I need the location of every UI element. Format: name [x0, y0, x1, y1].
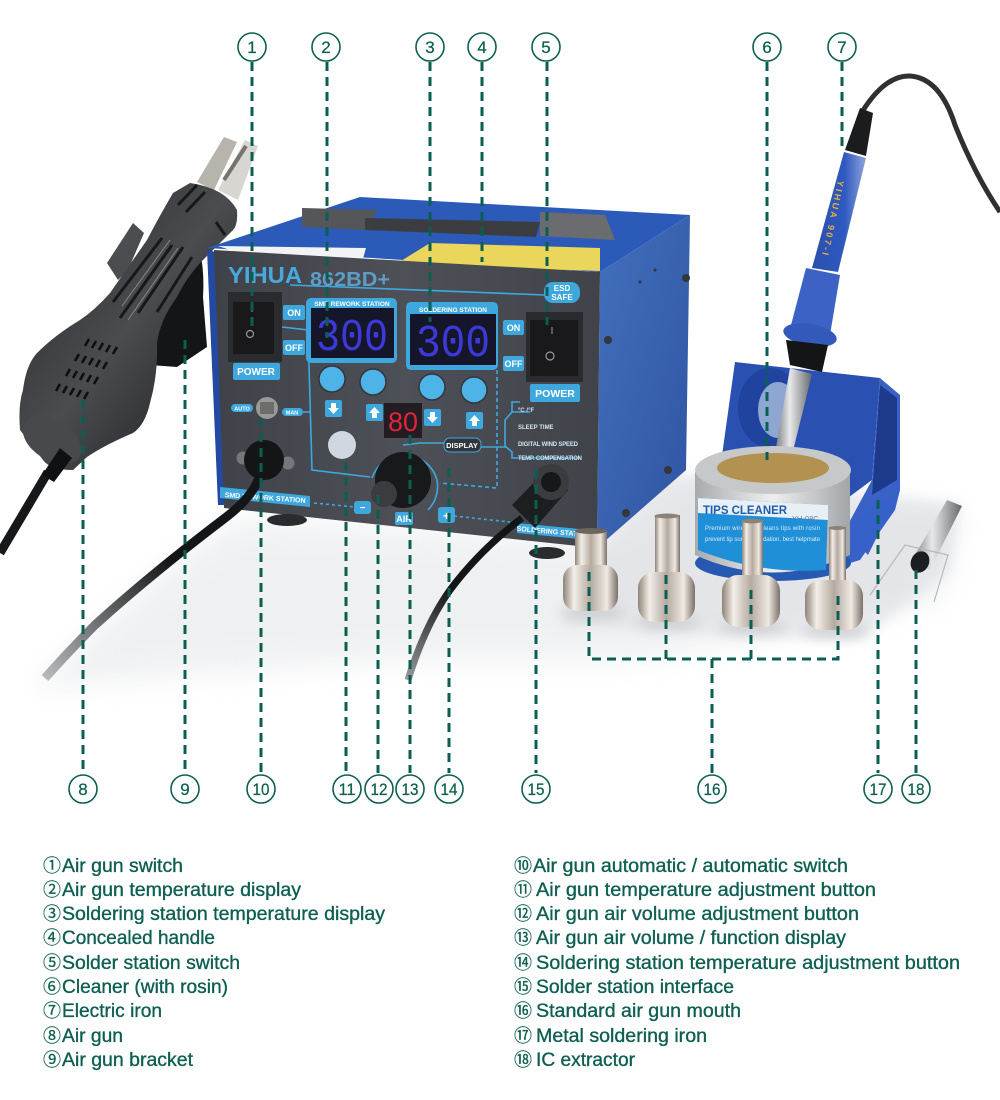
- callout 8: 8: [78, 780, 88, 799]
- front panel: [214, 250, 600, 548]
- nozzle C: [722, 518, 780, 627]
- nozzle A: [563, 528, 618, 611]
- air display: 80: [388, 407, 418, 437]
- gun rib highlights: [122, 240, 178, 320]
- yellow warning label: [396, 243, 600, 271]
- item 15: Solder station interface: [536, 977, 734, 998]
- right OFF: OFF: [504, 359, 523, 369]
- MAN label: [282, 408, 303, 416]
- cleaner label: YH-08C: [792, 514, 819, 523]
- callout 17: [864, 775, 892, 803]
- callout 14: [435, 775, 463, 803]
- callout 4: [468, 33, 496, 61]
- left POWER: POWER: [237, 367, 276, 378]
- air display: [384, 403, 422, 438]
- hot air gun: [0, 137, 258, 553]
- stand side wall: [845, 378, 900, 555]
- callout 6: [753, 33, 781, 61]
- item 9: Air gun bracket: [62, 1050, 194, 1071]
- arrow keys: [325, 400, 483, 429]
- top face: [207, 197, 690, 272]
- cleaner can: [695, 472, 850, 572]
- callout 9: 9: [180, 780, 190, 799]
- item 13: Air gun air volume / function display: [536, 928, 847, 949]
- iron black nut: [786, 340, 828, 372]
- gun ribs: [113, 185, 225, 318]
- item 13: ⑬: [514, 924, 532, 950]
- left cable: [45, 462, 262, 678]
- callout 3: [416, 33, 444, 61]
- left POWER: [233, 363, 280, 380]
- callout 10: 10: [252, 780, 270, 799]
- callout 2: [312, 33, 340, 61]
- nozzle B: [638, 514, 695, 622]
- gun body: [19, 183, 237, 470]
- SMD display: SMD REWORK STATION: [314, 301, 390, 308]
- item 1: Air gun switch: [62, 856, 183, 877]
- callout 17: 17: [870, 780, 886, 799]
- callout 18: 18: [908, 780, 924, 799]
- MAN label: MAN: [286, 410, 298, 416]
- function list: °C /°F: [518, 408, 534, 414]
- callout 12: [365, 775, 393, 803]
- left rocker switch: [228, 292, 282, 362]
- callout 5: 5: [541, 38, 551, 57]
- left OFF: OFF: [285, 343, 303, 353]
- rework station label: SMD REWORK STATION: [224, 492, 306, 505]
- ESD badge: SAFE: [551, 293, 573, 302]
- item 17: ⑰: [514, 1022, 532, 1048]
- item 17: Metal soldering iron: [536, 1026, 707, 1047]
- ESD badge: [544, 282, 580, 303]
- iron cord: [862, 76, 1000, 212]
- cleaner rim: [695, 446, 851, 494]
- item 4: ④: [43, 924, 61, 950]
- air gun nozzles: [563, 514, 863, 630]
- left ON: [283, 305, 305, 320]
- item 6: Cleaner (with rosin): [62, 977, 228, 998]
- silver button: [328, 431, 356, 459]
- callout 4: 4: [477, 38, 487, 57]
- item 10: ⑩: [514, 852, 532, 878]
- soldering display: [406, 302, 498, 370]
- callout 14: 14: [440, 780, 458, 799]
- soldering iron stand: [720, 362, 900, 572]
- callout 2: 2: [321, 38, 331, 57]
- soldering iron: [775, 76, 1000, 455]
- leader lines: [83, 62, 916, 773]
- item 3: ③: [43, 900, 61, 926]
- left ON: ON: [287, 308, 301, 318]
- item 6: ⑥: [43, 973, 61, 999]
- item 1: ①: [43, 852, 61, 878]
- item 5: ⑤: [43, 949, 61, 975]
- callout 11: [333, 775, 361, 803]
- item 10: Air gun automatic / automatic switch: [533, 856, 848, 877]
- soldering display: SOLDERING STATION: [419, 307, 487, 314]
- item 9: [43, 1046, 194, 1072]
- gun vent slots: [56, 339, 117, 399]
- handle: [302, 208, 615, 240]
- right connector: [512, 464, 569, 528]
- iron shaft text: YIHUA 907-I: [820, 180, 846, 256]
- item 15: ⑮: [514, 973, 532, 999]
- white label: [218, 246, 366, 262]
- right cable: [408, 518, 522, 680]
- AUTO label: AUTO: [234, 406, 250, 412]
- item 12: ⑫: [514, 900, 532, 926]
- item 1: [43, 852, 183, 878]
- brand: YIHUA: [228, 262, 302, 288]
- AUTO label: [231, 404, 253, 412]
- right ON: [503, 320, 524, 335]
- brand: 862BD+: [310, 269, 390, 291]
- callout 12: 12: [370, 780, 388, 799]
- item 14: Soldering station temperature adjustment button: [536, 953, 960, 974]
- callout 1: [238, 33, 266, 61]
- cleaner label: TIPS CLEANER: [703, 503, 787, 517]
- callout 16: 16: [704, 780, 720, 799]
- gun cord: [0, 472, 48, 553]
- callout 18: [902, 775, 930, 803]
- nozzle shadows: [560, 605, 870, 638]
- item 17: [514, 1022, 707, 1048]
- cleaner base: [695, 545, 851, 581]
- item 11: Air gun temperature adjustment button: [536, 880, 876, 901]
- air knob: [371, 452, 431, 508]
- callout 7: 7: [837, 38, 847, 57]
- cleaner label: [698, 498, 828, 571]
- legend: left column: [43, 852, 386, 1072]
- callout 9: [171, 775, 199, 803]
- AIR label: [395, 512, 413, 525]
- item 18: ⑱: [514, 1046, 532, 1072]
- callout 11: 11: [338, 780, 356, 799]
- iron shaft: [812, 152, 866, 272]
- item 14: ⑭: [514, 949, 532, 975]
- cleaner label: prevent tip surface oxidation, best helpmate: [705, 537, 821, 543]
- legend: right column: [514, 852, 960, 1072]
- item 7: ⑦: [43, 997, 61, 1023]
- item 8: Air gun: [62, 1026, 123, 1047]
- callout 15: [522, 775, 550, 803]
- function list: TEMP. COMPENSATION: [518, 456, 582, 462]
- item 8: ⑧: [43, 1022, 61, 1048]
- item 11: ⑪: [514, 876, 532, 902]
- SMD display: 300: [316, 313, 388, 364]
- item 16: Standard air gun mouth: [536, 1001, 741, 1022]
- item 9: ⑨: [43, 1046, 61, 1072]
- callout 6: 6: [762, 38, 772, 57]
- stand back plate: [720, 362, 880, 500]
- callout 10: [247, 775, 275, 803]
- minus key: −: [360, 503, 366, 514]
- left blue edge: [207, 250, 226, 505]
- holder ring: [738, 368, 802, 448]
- item 18: IC extractor: [536, 1050, 636, 1071]
- plus key: [438, 507, 455, 523]
- brand: [228, 262, 390, 291]
- left connector: [236, 440, 294, 480]
- gun strain relief: [42, 448, 72, 482]
- right rocker switch: [526, 312, 583, 382]
- panel buttons: [319, 366, 487, 403]
- brass wool: [717, 453, 829, 483]
- function list: [518, 408, 582, 462]
- gun metal nozzle tubes: [197, 137, 258, 200]
- base unit: [45, 197, 690, 680]
- iron strain relief: [845, 108, 873, 156]
- panel circuit lines: [282, 327, 580, 522]
- gun clip: [107, 223, 144, 280]
- item 18: [514, 1046, 636, 1072]
- item 3: Soldering station temperature display: [62, 904, 386, 925]
- plus key: +: [443, 509, 450, 523]
- callout 16: [698, 775, 726, 803]
- IC extractor: [870, 500, 962, 602]
- brand underline: [290, 285, 545, 295]
- iron collar: [782, 319, 838, 351]
- item 12: Air gun air volume adjustment button: [536, 904, 859, 925]
- callout 8: [69, 775, 97, 803]
- callout 1: 1: [247, 38, 257, 57]
- toggle switch: [256, 397, 278, 419]
- item 2: Air gun temperature display: [62, 880, 302, 901]
- stand inner shade: [872, 385, 897, 495]
- item 7: Electric iron: [62, 1001, 162, 1022]
- function list: SLEEP TIME: [518, 425, 554, 431]
- right POWER: POWER: [535, 388, 575, 400]
- callout 7: [828, 33, 856, 61]
- gun end cap: [14, 406, 90, 474]
- side face: [597, 215, 690, 548]
- gun bracket: [150, 240, 207, 367]
- item 5: Solder station switch: [62, 953, 240, 974]
- item 2: ②: [43, 876, 61, 902]
- callout 13: 13: [402, 780, 418, 799]
- extractor wires: [870, 545, 948, 602]
- item 8: [43, 1022, 123, 1048]
- callout 15: 15: [528, 780, 544, 799]
- right OFF: [503, 356, 524, 371]
- item 4: Concealed handle: [62, 928, 215, 949]
- soldering display: 300: [416, 319, 490, 370]
- iron grip: [791, 268, 840, 335]
- rework station label: [220, 487, 310, 507]
- right POWER: [530, 384, 580, 402]
- right ON: ON: [507, 323, 520, 333]
- item 16: ⑯: [514, 997, 532, 1023]
- side screws: [604, 268, 690, 517]
- DISPLAY label: [444, 438, 481, 452]
- callout 13: [396, 775, 424, 803]
- AIR label: AIR: [396, 514, 412, 524]
- soldering station label: SOLDERING STATION: [516, 526, 590, 539]
- extractor end: [907, 548, 933, 576]
- ESD badge: ESD: [554, 284, 570, 293]
- minus key: [354, 501, 371, 514]
- callout 3: 3: [425, 38, 435, 57]
- nozzle D: [805, 526, 863, 630]
- function list: DIGITAL WIND SPEED: [518, 442, 579, 448]
- SMD display: [306, 298, 397, 364]
- table shadows: [30, 470, 960, 690]
- callout 5: [532, 33, 560, 61]
- extractor body: [912, 500, 962, 570]
- feet: [267, 514, 565, 559]
- stand base: [820, 490, 900, 572]
- left OFF: [283, 340, 305, 355]
- tips cleaner: [695, 446, 851, 581]
- iron metal barrel: [775, 368, 812, 455]
- DISPLAY label: DISPLAY: [446, 441, 478, 450]
- item 7: [43, 997, 162, 1023]
- cleaner label: Premium wire tube cleans tips with rosin: [705, 526, 820, 532]
